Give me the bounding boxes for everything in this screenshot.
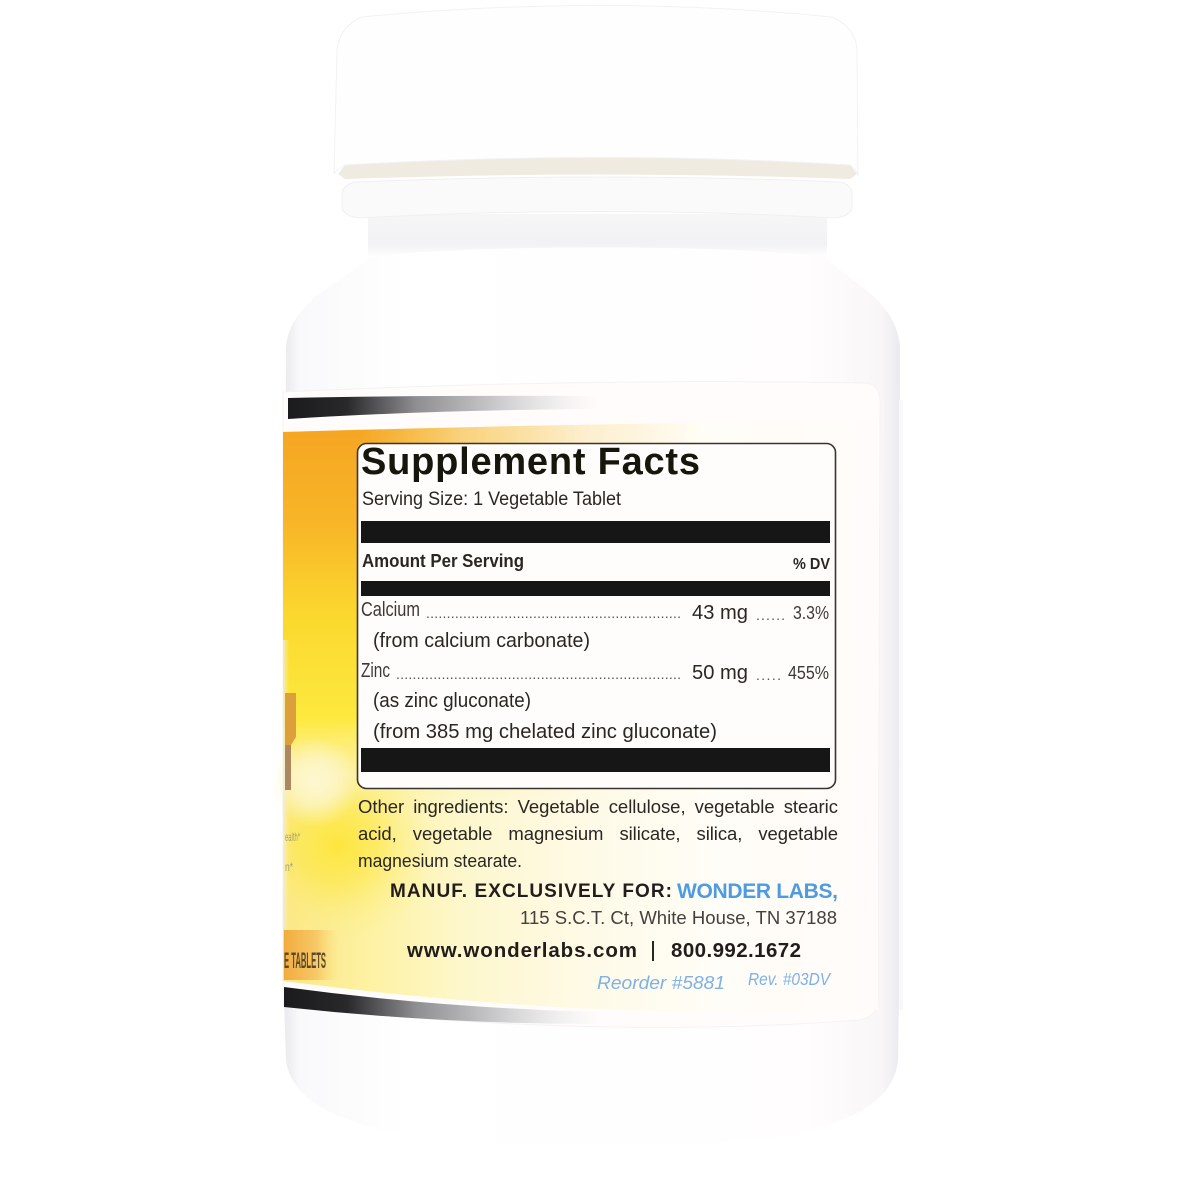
brand: WONDER LABS,: [677, 880, 838, 903]
manufactured for: MANUF. EXCLUSIVELY FOR:: [390, 881, 672, 902]
lower yellow glow: [283, 745, 440, 945]
pale highlight: [270, 737, 360, 827]
bottom black band: [284, 987, 600, 1024]
other ingredients: Other ingredients: Vegetable cellulose, vegetable stearic: [358, 796, 838, 817]
pale left edge: [283, 640, 289, 930]
zinc row: .....................................................................: [396, 666, 681, 682]
supplement facts panel: [358, 441, 836, 788]
neck ring: [342, 177, 852, 218]
calcium row: Calcium: [361, 599, 420, 621]
other ingredients: acid, vegetable magnesium silicate, silica, vegetable: [358, 823, 838, 844]
revision number: Rev. #03DV: [748, 969, 832, 989]
address: 115 S.C.T. Ct, White House, TN 37188: [520, 907, 837, 928]
reorder number: Reorder #5881: [597, 972, 725, 993]
label background: [270, 382, 880, 1027]
thick rule 1: [361, 521, 830, 543]
calcium row: 3.3%: [793, 602, 829, 623]
front panel glimpses at bottle edge: ealth*: [285, 830, 300, 844]
label colour field: [283, 420, 878, 1013]
lower brown lettering fragment: [285, 745, 291, 790]
thick rule 3: [361, 748, 830, 772]
percent dv heading: % DV: [793, 556, 830, 573]
label edge shadow: [899, 400, 903, 1010]
calcium row: [361, 599, 829, 624]
phone: 800.992.1672: [671, 939, 801, 962]
top black band: [288, 396, 600, 419]
separator: [652, 941, 654, 961]
website: www.wonderlabs.com: [406, 939, 637, 962]
bottle neck: [368, 214, 827, 258]
serving size: Serving Size: 1 Vegetable Tablet: [362, 489, 622, 510]
amount per serving: Amount Per Serving: [362, 551, 524, 571]
other ingredients: [358, 796, 838, 871]
orange gradient top: [283, 424, 669, 777]
zinc form: (as zinc gluconate): [373, 690, 531, 712]
orange tablets tab: [284, 930, 340, 980]
bottle product photo: E TABLETS: [284, 948, 326, 973]
calcium row: 43 mg: [692, 602, 748, 624]
manufacturer block: [390, 880, 838, 993]
zinc row: [361, 660, 829, 684]
zinc row: Zinc: [361, 660, 390, 682]
other ingredients: magnesium stearate.: [358, 850, 522, 871]
cap shadow gap: [338, 158, 857, 179]
bottle product photo: [276, 5, 900, 1102]
thick rule 2: [361, 581, 830, 596]
zinc row: 455%: [788, 662, 829, 683]
zinc row: 50 mg: [692, 662, 748, 684]
large orange lettering fragment: [285, 693, 296, 745]
zinc row: .....: [756, 667, 781, 683]
calcium row: ......: [756, 607, 785, 623]
faint claim text 2: n*: [285, 860, 293, 874]
calcium source: (from calcium carbonate): [373, 630, 590, 652]
zinc source: (from 385 mg chelated zinc gluconate): [373, 721, 717, 743]
panel heading: Supplement Facts: [361, 441, 700, 483]
calcium row: ..............................................................: [426, 605, 681, 621]
front panel glimpses at bottle edge: [284, 693, 340, 980]
bottle cap: [334, 6, 858, 176]
bottle body: [284, 215, 900, 1145]
